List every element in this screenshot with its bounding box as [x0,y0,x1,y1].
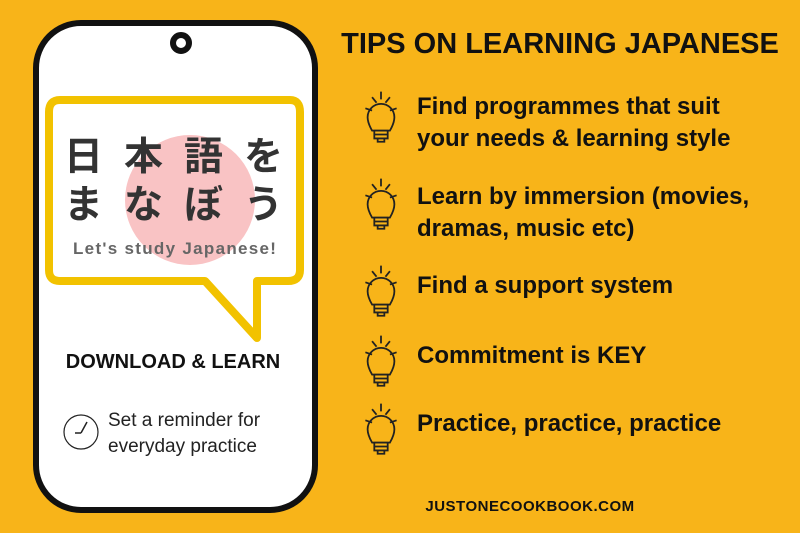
tip 5: Practice, practice, practice [417,410,721,437]
tip 2: Learn by immersion (movies, [417,183,749,210]
speech bubble [45,96,304,342]
icon: bulb 5 [365,404,397,455]
japanese text [64,136,304,227]
tip 1: Find programmes that suit [417,93,720,120]
tip 4: Commitment is KEY [417,342,646,369]
icon: bulb 2 [365,178,397,230]
download heading: DOWNLOAD & LEARN [66,351,280,373]
phone hole [170,32,192,54]
icon: bulb 1 [365,92,397,143]
japanese text: まなぼう [64,184,304,227]
tip 1: your needs & learning style [417,125,730,152]
reminder text: Set a reminder for [108,410,260,431]
phone [33,20,318,513]
title: TIPS ON LEARNING JAPANESE [341,28,779,60]
icon: clock [63,414,99,450]
tip 2 [417,183,749,242]
icon: bulb 3 [365,266,397,317]
icon: bulb 4 [365,336,397,387]
tip 1 [417,93,730,152]
footer: JUSTONECOOKBOOK.COM [425,498,635,515]
tip 2: dramas, music etc) [417,215,634,242]
tip 3: Find a support system [417,272,673,299]
reminder text [108,410,260,457]
reminder text: everyday practice [108,436,257,457]
japanese text: 日本語を [64,136,304,179]
subtitle: Let's study Japanese! [73,239,277,258]
